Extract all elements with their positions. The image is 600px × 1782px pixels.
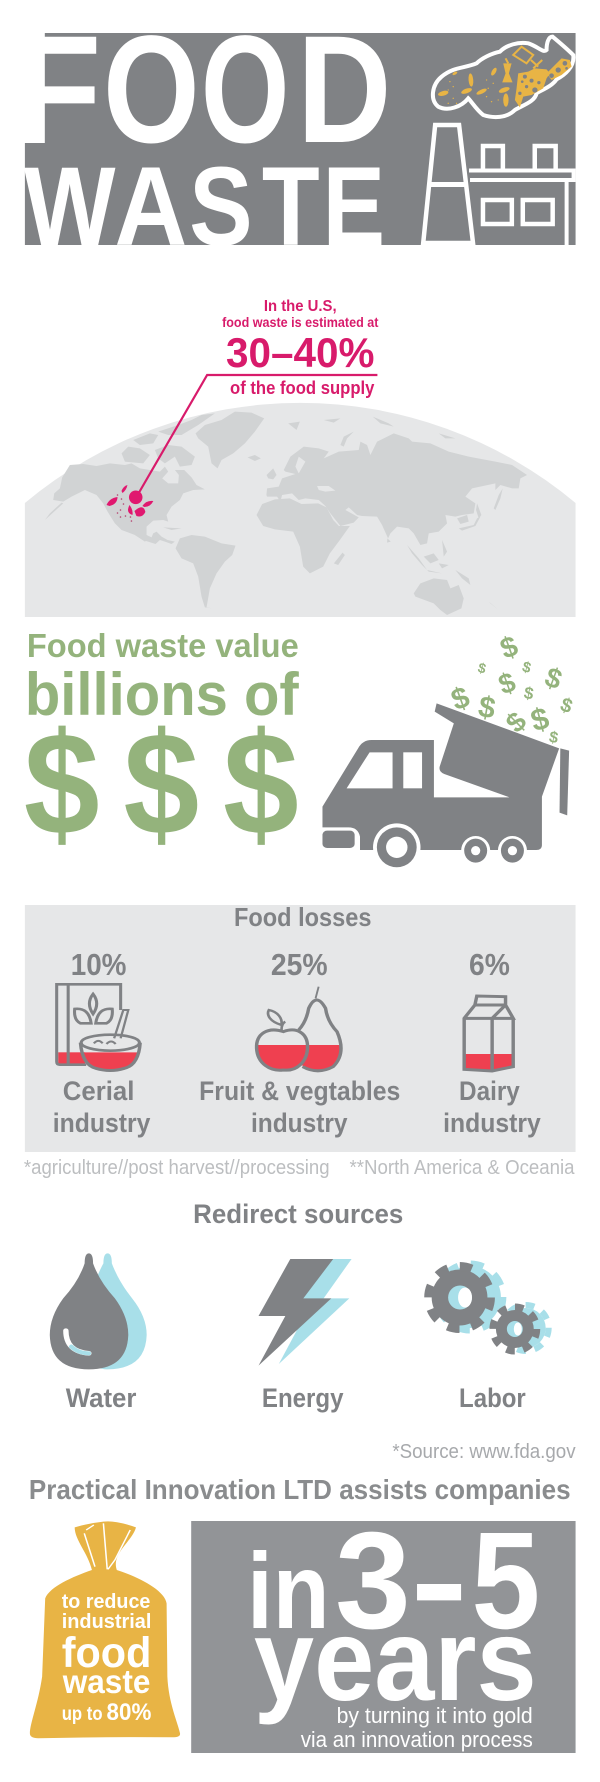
- big text: in 3-5: [247, 1504, 540, 1658]
- falling dollar signs: $: [522, 683, 536, 704]
- labels: sources: Water: [66, 1383, 137, 1413]
- big dollar signs: [24, 702, 299, 865]
- heading: food losses: Food losses: [234, 904, 371, 932]
- panel: 3-5 years: [191, 1504, 576, 1753]
- callout: U.S. food waste share: 30–40%: [226, 329, 374, 376]
- callout: U.S. food waste share: In the U.S,: [264, 298, 337, 315]
- panel: food losses: [25, 904, 576, 1152]
- labels: industries: [53, 1076, 541, 1138]
- falling dollar signs: [447, 630, 575, 747]
- big text: years: years: [254, 1594, 537, 1725]
- sack text: [62, 1591, 151, 1726]
- map: world dome: [25, 403, 576, 617]
- big text: in 3-5: 3: [335, 1504, 411, 1658]
- icon: gears: [429, 1264, 549, 1351]
- title: WASTE: S: [189, 144, 253, 269]
- icon: lightning bolt: [259, 1259, 352, 1366]
- title: WASTE: A: [115, 144, 187, 269]
- source note: *Source: www.fda.gov: [392, 1441, 576, 1463]
- big text: in 3-5: in: [247, 1530, 330, 1651]
- callout: U.S. food waste share: [107, 298, 379, 522]
- icon: milk carton: [464, 996, 513, 1071]
- falling dollar signs: $: [500, 705, 533, 739]
- sack text: to reduce: [62, 1591, 150, 1613]
- labels: sources: Energy: [262, 1383, 344, 1413]
- title: FOOD: O: [103, 5, 200, 175]
- labels: industries: Cerial: [63, 1076, 134, 1106]
- sack text: waste: [62, 1663, 150, 1700]
- percent values: [71, 947, 510, 982]
- footnotes: [24, 1157, 575, 1179]
- sack text: 80%: [107, 1699, 151, 1726]
- subtext: [301, 1703, 533, 1752]
- title: WASTE: E: [323, 144, 385, 269]
- heading: practical innovation: Practical Innovation LTD assists companies: [29, 1474, 571, 1505]
- falling dollar signs: $: [527, 700, 553, 738]
- big dollar signs: $: [223, 702, 299, 865]
- continents: Eurasia, Australia, islands: [266, 417, 527, 615]
- labels: sources: [66, 1383, 526, 1413]
- icon: cereal box and bowl: [57, 984, 140, 1070]
- icon: gold sack with text: [30, 1521, 180, 1738]
- falling dollar signs: $: [494, 666, 520, 701]
- percent values: 6%: [469, 947, 510, 982]
- header banner: [0, 0, 597, 275]
- labels: industries: Dairy: [459, 1076, 520, 1106]
- falling dollar signs: $: [496, 630, 522, 666]
- title: FOOD: [12, 5, 391, 175]
- falling dollar signs: $: [541, 661, 567, 696]
- title: WASTE: W: [24, 144, 116, 269]
- callout: U.S. food waste share: food waste is estimated at: [222, 314, 379, 330]
- icon: smoke cloud with food scraps: [433, 37, 573, 117]
- sack text: industrial: [62, 1611, 151, 1633]
- footnotes: *agriculture//post harvest//processing: [24, 1157, 330, 1179]
- icon: factory: [423, 125, 574, 245]
- title: FOOD: D: [297, 5, 391, 175]
- falling dollar signs: $: [476, 659, 488, 677]
- heading: food waste value: [24, 627, 300, 865]
- icon: water drop: [50, 1253, 147, 1369]
- icon: apple and pear: [257, 987, 341, 1071]
- sack text: up to: [62, 1704, 103, 1725]
- footnotes: **North America & Oceania: [350, 1157, 575, 1179]
- percent values: 10%: [71, 947, 126, 982]
- callout: U.S. food waste share: of the food supply: [230, 377, 375, 398]
- map pin and scraps: [107, 485, 153, 516]
- leader line: [136, 375, 377, 497]
- falling dollar signs: $: [548, 729, 559, 747]
- labels: industries: industry: [443, 1108, 541, 1138]
- title: FOOD: F: [12, 5, 102, 175]
- percent values: 25%: [271, 947, 328, 982]
- falling dollar signs: $: [557, 694, 575, 718]
- labels: sources: Labor: [459, 1383, 526, 1413]
- labels: industries: Fruit & vegtables: [199, 1076, 400, 1106]
- big text: in 3-5: 5: [472, 1504, 540, 1658]
- title: WASTE: [24, 144, 385, 269]
- labels: industries: industry: [251, 1108, 348, 1138]
- labels: industries: industry: [53, 1108, 150, 1138]
- continents: Americas, Greenland, Africa: [45, 412, 350, 608]
- big text: in 3-5: -: [410, 1504, 468, 1658]
- falling dollar signs: $: [447, 680, 474, 717]
- sack text: food: [62, 1629, 151, 1677]
- icon: dump truck: [322, 703, 569, 871]
- falling dollar signs: $: [520, 658, 533, 677]
- heading: food waste value: billions of: [25, 661, 300, 728]
- subtext: via an innovation process: [301, 1727, 533, 1752]
- subtext: by turning it into gold: [337, 1703, 533, 1728]
- heading: food waste value: Food waste value: [27, 627, 299, 664]
- title: WASTE: T: [262, 144, 320, 269]
- falling dollar signs: $: [476, 690, 498, 726]
- big dollar signs: $: [123, 702, 199, 865]
- heading: redirect sources: Redirect sources: [193, 1199, 403, 1229]
- title: FOOD: O: [201, 5, 289, 175]
- big dollar signs: $: [24, 702, 100, 865]
